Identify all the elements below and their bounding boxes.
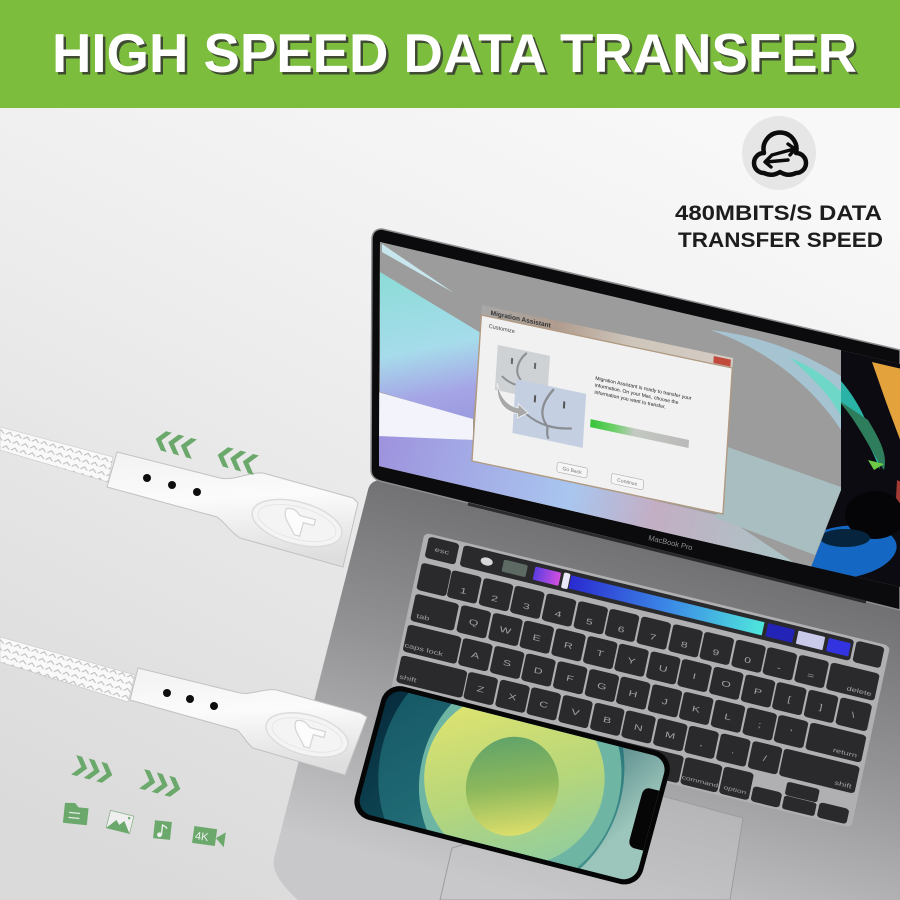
icon: transfer arrow [495, 383, 529, 420]
bottom connector [130, 668, 367, 775]
number row keys [417, 563, 879, 701]
hinge [468, 504, 866, 602]
top cable braid [0, 427, 113, 482]
key legends: esc [434, 546, 450, 556]
key legends: ' [789, 729, 793, 737]
key legends: W [499, 625, 512, 637]
laptop lid bezel [371, 229, 900, 610]
screen wallpaper [370, 230, 900, 600]
key legends: 7 [649, 633, 657, 643]
key legends: T [595, 649, 605, 659]
key legends: 9 [712, 648, 720, 658]
touch bar row [425, 537, 884, 668]
key legends: L [723, 713, 732, 723]
window title bar: Migration Assistant [490, 310, 552, 330]
key legends: S [502, 659, 512, 669]
feature label [675, 202, 883, 252]
icon: folder [63, 802, 89, 825]
key legends: Q [468, 618, 479, 629]
key legends: , [699, 739, 704, 748]
window message [594, 376, 692, 416]
key legends: shift [399, 673, 418, 684]
title text: HIGH SPEED DATA TRANSFER [52, 22, 857, 84]
bottom row keys [390, 686, 851, 824]
key legends: B [602, 716, 612, 726]
migration assistant window [472, 305, 733, 514]
icon: music [153, 820, 172, 840]
icon: cloud with transfer arrows [754, 132, 806, 175]
key legends: tab [416, 612, 431, 622]
key legends: D [533, 666, 543, 677]
keyboard [386, 533, 890, 828]
title text: HIGH SPEED DATA TRANSFER [54, 24, 860, 86]
laptop base [274, 480, 900, 900]
key legends: return [832, 747, 858, 759]
feature badge: data transfer speed [675, 116, 883, 252]
window message: information. On your Mac, choose the [595, 383, 679, 406]
key legends: ; [757, 721, 762, 730]
key legends: 3 [522, 602, 531, 612]
window message: information you want to transfer. [594, 390, 666, 411]
key legends: G [596, 682, 607, 692]
feature label: 480MBITS/S DATA [675, 202, 882, 225]
key legends: M [664, 731, 676, 741]
key legends: 2 [490, 594, 499, 604]
arrows: leftward data flow [153, 429, 259, 475]
window message: Migration Assistant is ready to transfer your [595, 376, 692, 402]
key legends: / [762, 755, 767, 764]
icon: 4K video camera: 4K [194, 830, 210, 844]
key legends [391, 544, 881, 820]
key legends: U [658, 664, 668, 675]
trackpad [440, 790, 743, 900]
qwerty row keys [411, 594, 872, 731]
logo badge [247, 491, 347, 555]
window title bar [481, 305, 733, 369]
wallpaper: dark right section [794, 349, 900, 587]
chevrons upper left [153, 429, 197, 459]
key legends: K [691, 705, 701, 715]
chevrons lower left [71, 755, 115, 785]
MacBook Pro label: MacBook Pro [648, 533, 693, 552]
migration assistant window: Customize [489, 324, 515, 335]
arrows: rightward data flow [71, 755, 183, 799]
key legends: F [565, 674, 574, 684]
key legends: 1 [459, 587, 468, 597]
key legends: H [628, 689, 638, 700]
key legends: J [661, 697, 669, 707]
key legends: = [806, 671, 815, 681]
feature label: TRANSFER SPEED [678, 229, 883, 252]
key legends: 6 [617, 625, 626, 635]
wallpaper: left colour bands [380, 272, 481, 420]
icon: 4K video camera [192, 826, 226, 847]
chevrons upper right [215, 445, 259, 475]
key legends: caps lock [404, 642, 444, 658]
media type icons [63, 802, 226, 847]
bottom cable braid [0, 637, 135, 702]
title banner [0, 0, 900, 108]
window buttons: Continue [617, 478, 638, 488]
key legends: ] [818, 703, 823, 712]
home row keys [403, 625, 866, 762]
key legends: E [532, 633, 541, 644]
key legends: \ [850, 711, 856, 720]
laptop [274, 229, 900, 900]
key legends: - [776, 664, 782, 673]
key legends: P [753, 687, 763, 698]
phone notch [628, 787, 659, 851]
key legends: Y [626, 657, 636, 667]
wallpaper: grey overlay [370, 230, 841, 575]
key legends: O [720, 679, 732, 690]
chevrons lower right [139, 769, 183, 799]
key legends: 0 [743, 656, 752, 666]
phone wallpaper [360, 691, 665, 880]
icon: image [106, 810, 134, 834]
key legends: R [563, 641, 573, 651]
key legends: N [633, 723, 643, 734]
key legends: C [538, 700, 549, 711]
key legends: 5 [585, 617, 594, 627]
key legends: 8 [680, 641, 689, 650]
top connector [107, 452, 358, 567]
key legends: option [723, 784, 747, 796]
window buttons: Go Back [562, 466, 582, 476]
icon: source finder face [495, 345, 550, 401]
key legends: V [570, 708, 580, 718]
progress bar [590, 419, 689, 448]
shift row keys [397, 656, 859, 793]
key legends: [ [786, 696, 792, 705]
key legends: command [681, 774, 719, 789]
icon: destination finder face [512, 379, 586, 448]
key legends: X [507, 693, 517, 703]
phone [354, 686, 670, 884]
key legends: I [692, 672, 697, 682]
window buttons [557, 462, 644, 490]
key legends: . [730, 747, 736, 756]
key legends: delete [846, 685, 873, 698]
logo badge [261, 705, 353, 765]
key legends: shift [834, 779, 853, 790]
key legends: 4 [554, 610, 562, 620]
key legends: Z [476, 685, 485, 695]
key legends: A [470, 651, 480, 661]
